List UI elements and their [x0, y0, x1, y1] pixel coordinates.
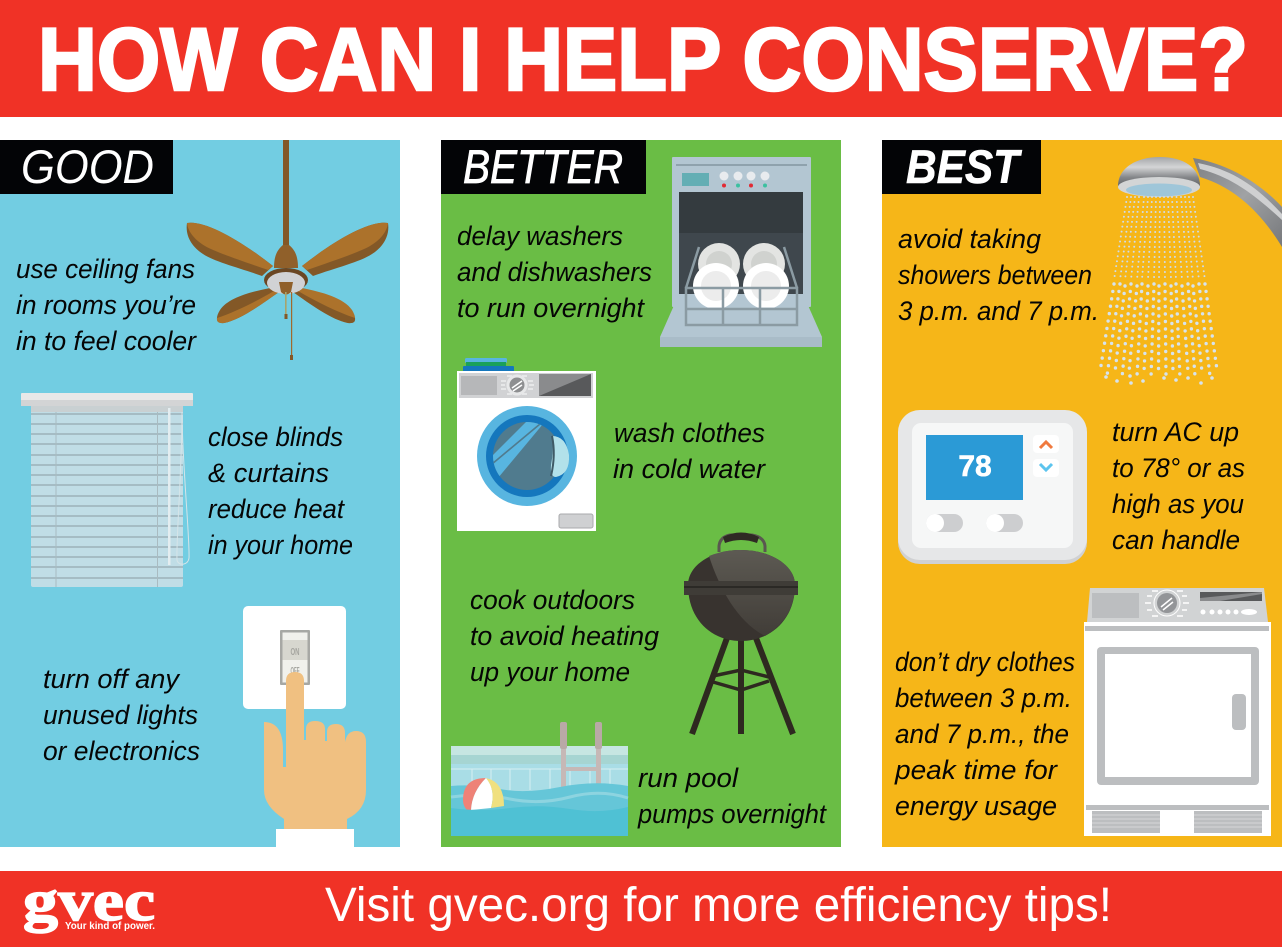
text: thermostat tip [1112, 417, 1245, 555]
text: showers tip: showers between [898, 260, 1092, 290]
text: dryer tip: energy usage [895, 791, 1057, 821]
logo: gvec: Your kind of power. [65, 921, 155, 932]
icon: shower head and water [1100, 157, 1282, 385]
text: washers tip: delay washers [457, 221, 623, 251]
text: pool tip: pumps overnight [637, 799, 827, 829]
text: blinds tip: in your home [208, 530, 353, 560]
text: cold water tip: wash clothes [614, 418, 765, 448]
icon: thermostat [898, 410, 1087, 564]
text: cold water tip [613, 418, 766, 484]
text: thermostat tip: to 78° or as [1112, 453, 1245, 483]
text: pool tip [637, 763, 827, 829]
text: blinds tip: close blinds [208, 422, 343, 452]
icon: light switch and hand: ON [290, 647, 300, 658]
text: outdoors tip [470, 585, 659, 687]
text: blinds tip: reduce heat [208, 494, 345, 524]
text: lights tip [43, 664, 200, 766]
panel: good [0, 140, 400, 847]
text: ceiling fans tip: in to feel cooler [16, 326, 197, 356]
text: dryer tip: don’t dry clothes [895, 647, 1075, 677]
icon: light switch and hand: OFF [290, 666, 300, 677]
panel: best [882, 140, 1282, 847]
text: cold water tip: in cold water [613, 454, 766, 484]
heading: best: BEST [906, 140, 1023, 193]
text: lights tip: or electronics [43, 736, 200, 766]
text: ceiling fans tip: use ceiling fans [16, 254, 195, 284]
icon: clothes dryer [1084, 588, 1271, 836]
text: dryer tip: between 3 p.m. [895, 683, 1072, 713]
text: ceiling fans tip: in rooms you’re [16, 290, 196, 320]
icon: washing machine [457, 358, 596, 531]
icon: swimming pool [451, 722, 628, 836]
text: showers tip: 3 p.m. and 7 p.m. [898, 296, 1099, 326]
text: lights tip: unused lights [43, 700, 198, 730]
text: outdoors tip: cook outdoors [470, 585, 635, 615]
icon: dishwasher [660, 157, 822, 347]
text: showers tip: avoid taking [898, 224, 1041, 254]
icon: light switch and hand [243, 606, 366, 847]
heading: better: BETTER [463, 140, 623, 193]
text: blinds tip [208, 422, 353, 560]
text: ceiling fans tip [16, 254, 197, 356]
text: pool tip: run pool [638, 763, 739, 793]
text: showers tip [898, 224, 1099, 326]
text: dryer tip [894, 647, 1075, 821]
text: washers tip: to run overnight [457, 293, 645, 323]
text: washers tip [457, 221, 652, 323]
text: lights tip: turn off any [43, 664, 180, 694]
logo: gvec: gvec [23, 868, 155, 933]
text: washers tip: and dishwashers [457, 257, 652, 287]
heading: good: GOOD [21, 140, 154, 193]
panel: better [441, 140, 841, 847]
footer call to action: Visit gvec.org for more efficiency tips! [325, 879, 1112, 932]
text: thermostat tip: high as you [1112, 489, 1244, 519]
text: thermostat tip: turn AC up [1112, 417, 1239, 447]
icon: window blinds [21, 393, 193, 587]
icon: ceiling fan [187, 140, 388, 360]
icon: thermostat: 78 [958, 450, 992, 483]
text: blinds tip: & curtains [208, 458, 329, 488]
text: thermostat tip: can handle [1112, 525, 1240, 555]
text: dryer tip: peak time for [894, 755, 1058, 785]
text: outdoors tip: up your home [470, 657, 630, 687]
text: outdoors tip: to avoid heating [470, 621, 659, 651]
footer banner [0, 868, 1282, 947]
icon: kettle grill [684, 532, 798, 734]
text: dryer tip: and 7 p.m., the [895, 719, 1069, 749]
